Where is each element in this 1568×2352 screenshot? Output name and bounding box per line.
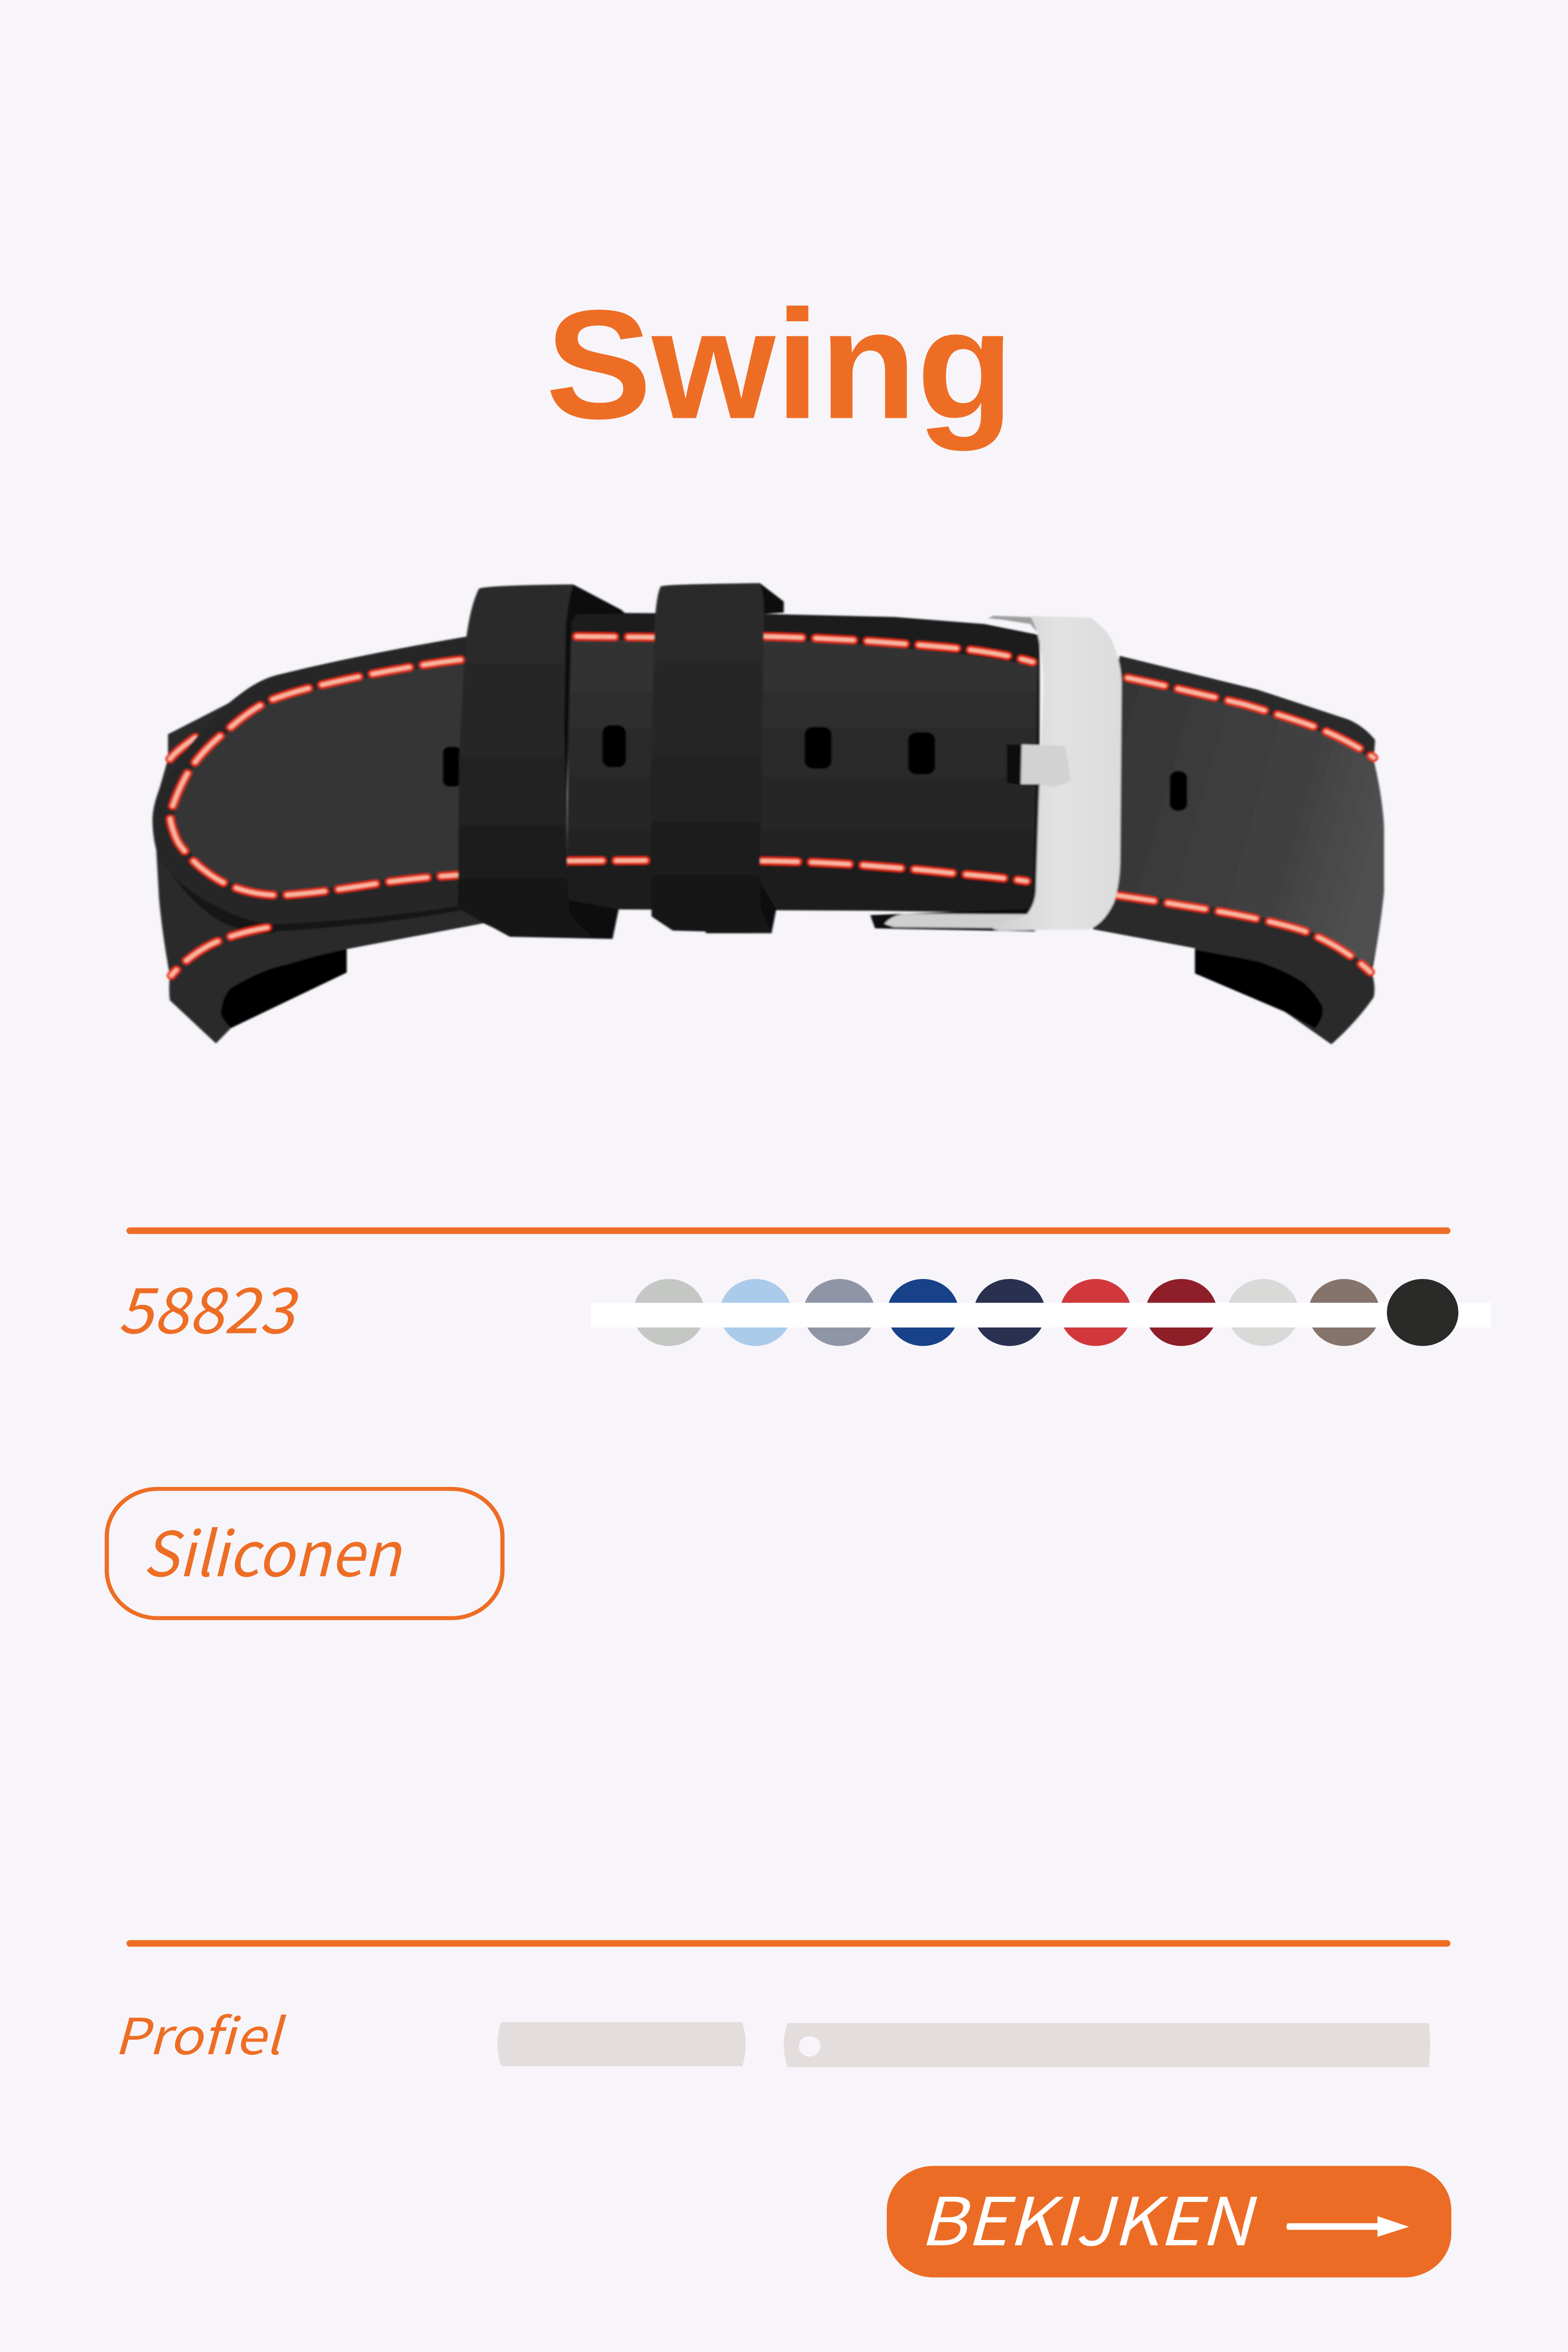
- material tag: [107, 1489, 502, 1618]
- buckle prong: [1021, 745, 1070, 787]
- white band: [591, 1303, 1491, 1327]
- watch strap image: [152, 583, 1384, 1044]
- product code: 58823: [118, 1260, 300, 1351]
- button shape: [887, 2166, 1451, 2278]
- first keeper: [458, 584, 626, 939]
- buckle frame: [992, 616, 1122, 930]
- tag outline: [107, 1489, 502, 1618]
- centre holes: [602, 725, 935, 774]
- selected black swatch: [1387, 1279, 1458, 1346]
- tag label: Siliconen: [143, 1505, 403, 1595]
- buckle bottom bar: [870, 908, 1035, 931]
- title: Swing: [546, 278, 1014, 452]
- buckle: [870, 616, 1122, 931]
- profile bar long: [784, 2023, 1430, 2067]
- right strap: [1093, 656, 1384, 1044]
- lower left strap: [152, 703, 494, 1043]
- tail hole: [443, 747, 462, 787]
- buckle top bar: [988, 616, 1040, 635]
- top divider: [127, 1227, 1450, 1234]
- buckle shadow: [1007, 745, 1021, 785]
- arrow: [1286, 2216, 1409, 2237]
- bottom divider: [127, 1940, 1450, 1947]
- colour swatches: [591, 1279, 1491, 1346]
- centre strap: [565, 612, 1040, 913]
- second keeper: [650, 583, 784, 933]
- profile bar dot: [799, 2036, 820, 2057]
- folded strap tail: [152, 635, 475, 924]
- profile bar short: [498, 2022, 746, 2066]
- swatch row: [633, 1279, 1380, 1346]
- right strap hole: [1170, 771, 1187, 811]
- button label: BEKIJKEN: [919, 2169, 1258, 2265]
- button: [887, 2166, 1451, 2278]
- profile label: Profiel: [114, 1996, 287, 2069]
